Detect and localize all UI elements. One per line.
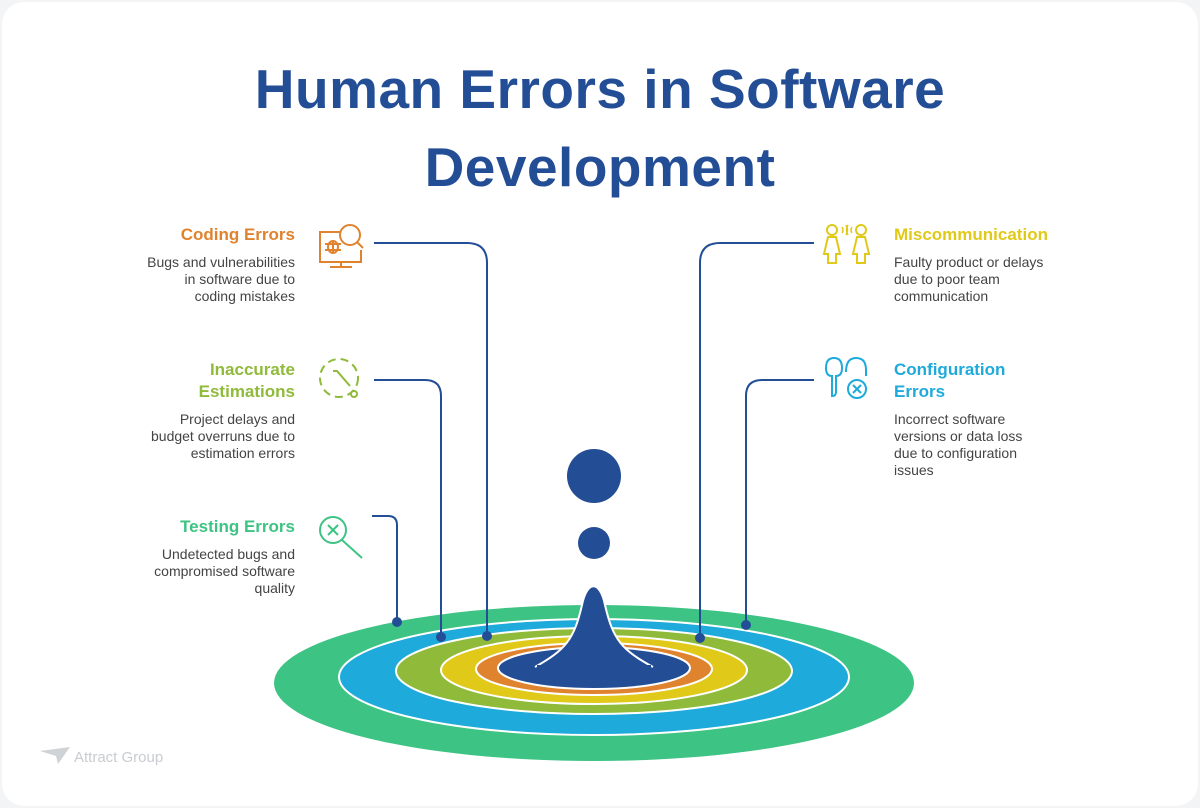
title: Human Errors in Software	[255, 58, 945, 120]
icon: config earbuds	[826, 358, 866, 398]
text: configuration errors: Errors	[894, 382, 945, 401]
text: inaccurate estimations: estimation errors	[191, 445, 295, 461]
logo: Attract Group	[40, 747, 163, 766]
connector: testing	[372, 516, 401, 626]
text: coding errors: Bugs and vulnerabilities	[147, 254, 295, 270]
text: inaccurate estimations: budget overruns due to	[151, 428, 295, 444]
connector: miscommunication	[696, 243, 814, 642]
title	[255, 58, 945, 198]
text: testing errors: Undetected bugs and	[162, 546, 295, 562]
text: testing errors	[154, 517, 295, 596]
text: testing errors: quality	[255, 580, 295, 596]
droplet small	[578, 527, 610, 559]
text: coding errors: in software due to	[184, 271, 295, 287]
text: configuration errors: Incorrect software	[894, 411, 1005, 427]
icon: people talking	[824, 225, 869, 263]
text: miscommunication: due to poor team	[894, 271, 1000, 287]
logo: Attract Group: Attract Group	[74, 749, 163, 766]
text: inaccurate estimations: Project delays and	[180, 411, 295, 427]
text: configuration errors: due to configuration	[894, 445, 1017, 461]
text: inaccurate estimations: Inaccurate	[210, 360, 295, 379]
text: coding errors: coding mistakes	[195, 288, 295, 304]
text: miscommunication: Faulty product or delays	[894, 254, 1043, 270]
connector: estimations	[374, 380, 445, 641]
text: coding errors	[147, 225, 295, 304]
text: miscommunication: Miscommunication	[894, 225, 1048, 244]
text: configuration errors: issues	[894, 462, 934, 478]
text: miscommunication: communication	[894, 288, 988, 304]
connector: coding	[374, 243, 491, 640]
connector: configuration	[742, 380, 814, 629]
icon: clock	[320, 359, 358, 397]
text: configuration errors	[894, 360, 1022, 478]
icon: search x	[320, 517, 362, 558]
text: inaccurate estimations: Estimations	[199, 382, 295, 401]
text: testing errors: compromised software	[154, 563, 295, 579]
text: configuration errors: Configuration	[894, 360, 1005, 379]
text: inaccurate estimations	[151, 360, 295, 461]
droplet large	[567, 449, 621, 503]
ripple target rings	[274, 605, 914, 761]
text: configuration errors: versions or data loss	[894, 428, 1022, 444]
icon: bug monitor	[320, 225, 363, 267]
text: miscommunication	[894, 225, 1048, 304]
text: testing errors: Testing Errors	[180, 517, 295, 536]
text: coding errors: Coding Errors	[181, 225, 295, 244]
title: Development	[425, 136, 775, 198]
water spike	[535, 586, 653, 671]
